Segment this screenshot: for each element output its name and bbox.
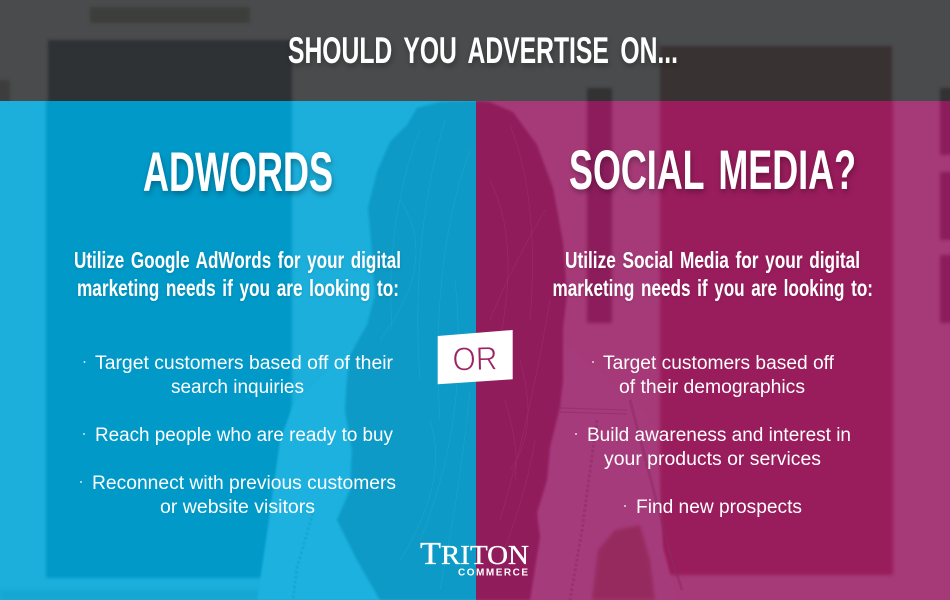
bullet list: AdWords reasons: search inquiries — [171, 377, 304, 398]
panel: AdWords blue photo overlay — [0, 101, 476, 600]
logo: Triton Commerce: COMMERCE — [458, 568, 528, 578]
bullet list: Social Media reasons: Build awareness and interest in — [587, 425, 851, 446]
bullet list: Social Media reasons: of their demographics — [619, 377, 805, 398]
bullet list: Social Media reasons: Find new prospects — [636, 497, 802, 518]
bullet list: Social Media reasons: Target customers based off — [603, 353, 835, 374]
text block: Social Media intro: Utilize Social Media for your digital — [565, 247, 860, 273]
bullet list: Social Media reasons: your products or services — [604, 449, 821, 470]
bullet list: Social Media reasons — [575, 353, 851, 518]
OR badge: OR — [452, 339, 498, 378]
bullet list: AdWords reasons: Reconnect with previous customers — [92, 473, 396, 494]
text block: AdWords intro — [74, 247, 401, 301]
logo: Triton Commerce: TRITON — [420, 535, 529, 571]
panel: Social Media magenta photo overlay — [476, 101, 950, 600]
title: SHOULD YOU ADVERTISE ON... — [288, 30, 678, 71]
text block: Social Media intro — [552, 247, 873, 301]
heading: AdWords: ADWORDS — [143, 140, 333, 203]
photo background: header band — [0, 0, 950, 112]
bullet list: AdWords reasons: or website visitors — [160, 497, 315, 518]
text block: AdWords intro: Utilize Google AdWords for your digital — [74, 247, 401, 273]
bullet list: AdWords reasons — [80, 353, 396, 518]
text block: AdWords intro: marketing needs if you are looking to: — [77, 275, 399, 301]
OR badge — [438, 330, 513, 384]
bullet list: AdWords reasons: Target customers based off of their — [95, 353, 394, 374]
bullet list: AdWords reasons: Reach people who are ready to buy — [95, 425, 393, 446]
